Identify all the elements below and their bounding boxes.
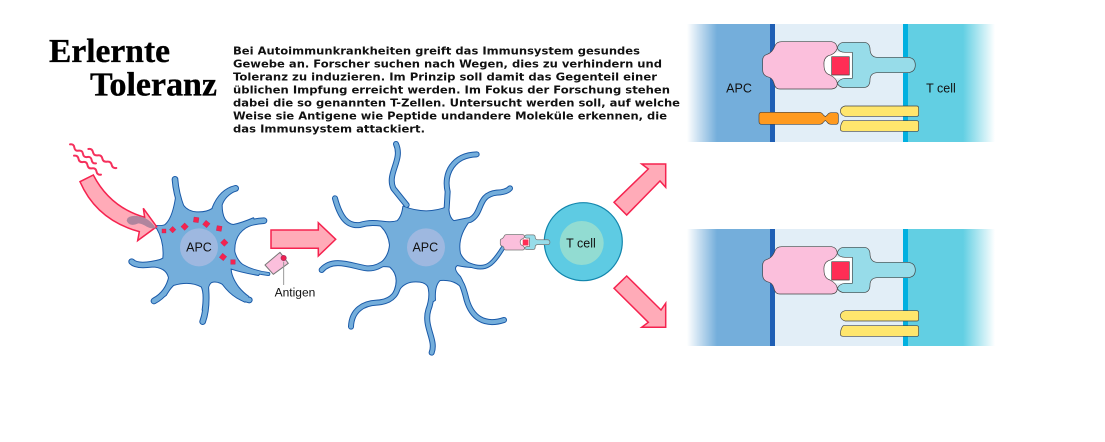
yellow receptor chain [840,121,919,131]
antigen on the cell surface [265,252,288,285]
MHC molecule [763,247,837,294]
label: T cell: T cell [926,82,956,96]
synaptic gap [775,229,903,346]
label: APC: APC [412,241,438,255]
icon: pathogen squiggles [70,144,116,175]
label: APC: APC [186,241,212,255]
arrow: down to tolerance panel [614,276,666,327]
APC membrane side [687,24,770,142]
synaptic gap [775,24,903,142]
arrow: uptake into the cell [80,175,157,241]
APC membrane [770,24,775,142]
intro text block: das Immunsystem attackiert. [233,122,425,136]
yellow receptor chain [840,106,919,116]
orange costimulatory molecule [759,112,838,124]
label: Antigen: Antigen [275,286,315,300]
cell fill [132,179,268,322]
label: APC: APC [726,82,752,96]
T cell receptor [837,247,915,293]
panel: synapse without costimulation [687,229,995,346]
MHC molecule [763,42,837,89]
cell outline [322,144,510,353]
title [49,33,217,104]
T cell [544,203,622,281]
T cell receptor [837,42,915,88]
APC membrane [770,229,775,346]
small receptor contact [500,235,550,250]
APC membrane side [687,229,770,346]
title: Toleranz [90,66,217,104]
peptide [832,262,849,280]
intro text block: dabei die so genannten T-Zellen. Untersucht werden soll, auf welche [233,96,680,110]
arrow: up to activation panel [614,164,666,215]
engulfed antigen [127,216,156,228]
intro text block: Toleranz zu induzieren. Im Prinzip soll damit das Gegenteil einer [233,70,658,84]
panel: synapse with costimulation [687,24,995,142]
mature APC cell [322,144,510,353]
T cell membrane [903,229,908,346]
cell fill [322,144,510,353]
outer membrane [544,203,622,281]
yellow receptor chain [840,311,919,321]
molecule complex [763,247,919,336]
intro text block [233,44,680,136]
arrow: maturation [271,223,336,256]
nucleus [180,228,218,266]
processed peptide fragments [162,217,235,264]
label: T cell: T cell [566,236,596,250]
nucleus [407,228,445,266]
yellow receptor chain [840,326,919,336]
T cell membrane [903,24,908,142]
intro text block: Weise sie Antigene wie Peptide undandere Moleküle erkennen, die [233,110,667,122]
cell outline [132,179,268,322]
intro text block: Gewebe an. Forscher suchen nach Wegen, dies zu verhindern und [233,58,662,70]
intro text block: Bei Autoimmunkrankheiten greift das Immunsystem gesundes [233,44,640,58]
peptide [832,57,849,75]
immature APC cell [80,175,315,322]
nucleus [560,221,604,265]
molecule complex [759,42,919,131]
T cell side [908,24,995,142]
T cell side [908,229,995,346]
intro text block: üblichen Impfung erreicht werden. Im Fokus der Forschung stehen [233,84,670,96]
title: Erlernte [49,33,170,70]
